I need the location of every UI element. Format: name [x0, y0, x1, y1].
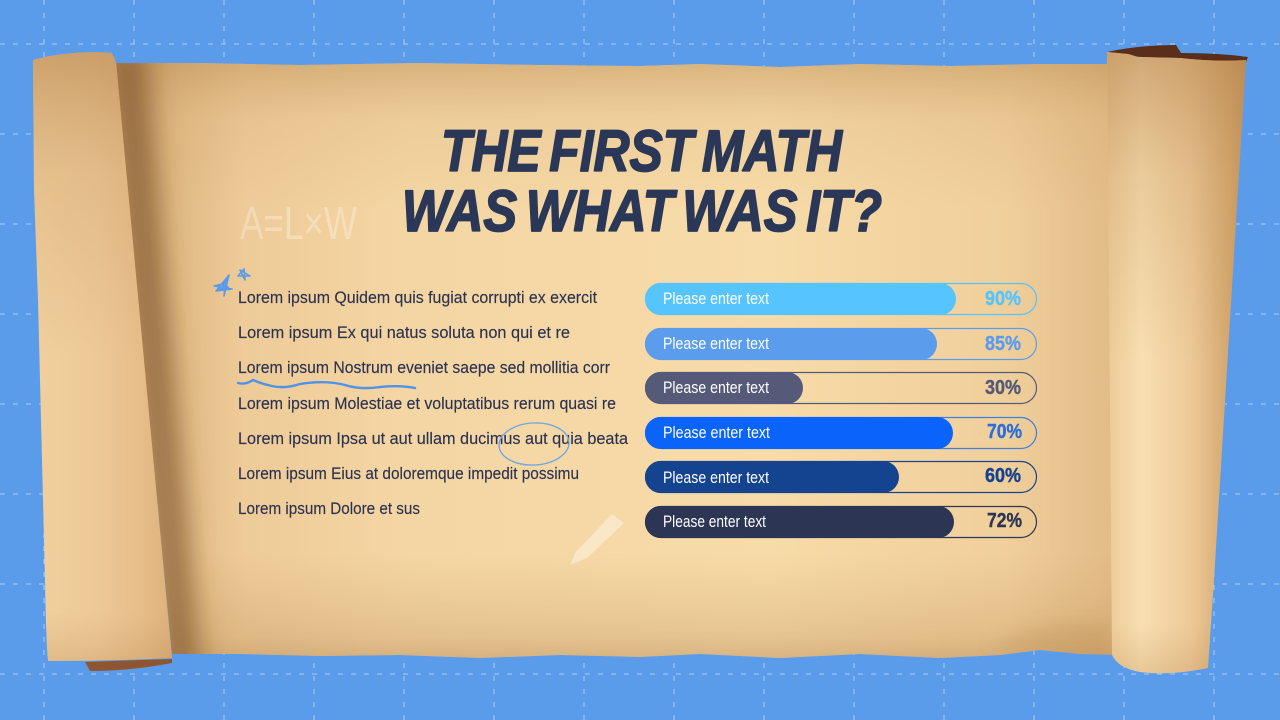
left roll back tab	[85, 659, 172, 671]
bar 2: 85%: Please enter text	[663, 334, 769, 353]
bar 4: 70%: 70%	[987, 421, 1022, 443]
bar 6: 72%: 72%	[987, 510, 1022, 532]
text list	[238, 288, 629, 518]
text list: Lorem ipsum Molestiae et voluptatibus rerum quasi re	[238, 394, 616, 413]
bar chart	[645, 283, 1036, 538]
parchment sheet	[100, 50, 1130, 670]
bar 3: 30%: 30%	[985, 377, 1021, 399]
text list: Lorem ipsum Quidem quis fugiat corrupti ex exercit	[238, 288, 597, 307]
bar 1: 90%	[645, 283, 1036, 315]
bar 5: 60%	[645, 461, 1036, 493]
bar 4: 70%: Please enter text	[663, 423, 770, 442]
right roll dark top	[1107, 45, 1248, 62]
text list: Lorem ipsum Dolore et sus	[238, 499, 420, 518]
title: THE FIRST MATH	[441, 119, 843, 184]
left roll	[33, 52, 172, 661]
bar 1: 90%: Please enter text	[663, 289, 769, 308]
bar 6: 72%: Please enter text	[663, 512, 766, 531]
bar 6: 72%	[645, 506, 1036, 538]
bar 3: 30%: Please enter text	[663, 378, 769, 397]
bar 4: 70%	[645, 417, 1036, 449]
text list: Lorem ipsum Ipsa ut aut ullam ducimus aut quia beata	[238, 429, 629, 448]
formula sketch: A=L×W	[240, 197, 357, 249]
text list: Lorem ipsum Eius at doloremque impedit possimu	[238, 464, 579, 483]
icon: blue stars	[214, 269, 250, 296]
bar 3: 30%	[645, 372, 1036, 404]
bar 1: 90%: 90%	[985, 288, 1021, 310]
bar 2: 85%	[645, 328, 1036, 360]
bar 5: 60%: 60%	[985, 465, 1021, 487]
title	[402, 119, 882, 244]
icon: pencil	[570, 514, 624, 565]
wavy underline	[238, 380, 415, 388]
circle annotation	[498, 421, 570, 467]
text list: Lorem ipsum Ex qui natus soluta non qui et re	[238, 323, 570, 342]
right roll	[1107, 52, 1246, 673]
text list: Lorem ipsum Nostrum eveniet saepe sed mollitia corr	[238, 358, 610, 377]
bar 5: 60%: Please enter text	[663, 468, 769, 487]
title: WAS WHAT WAS IT?	[402, 179, 882, 244]
bar 2: 85%: 85%	[985, 333, 1021, 355]
